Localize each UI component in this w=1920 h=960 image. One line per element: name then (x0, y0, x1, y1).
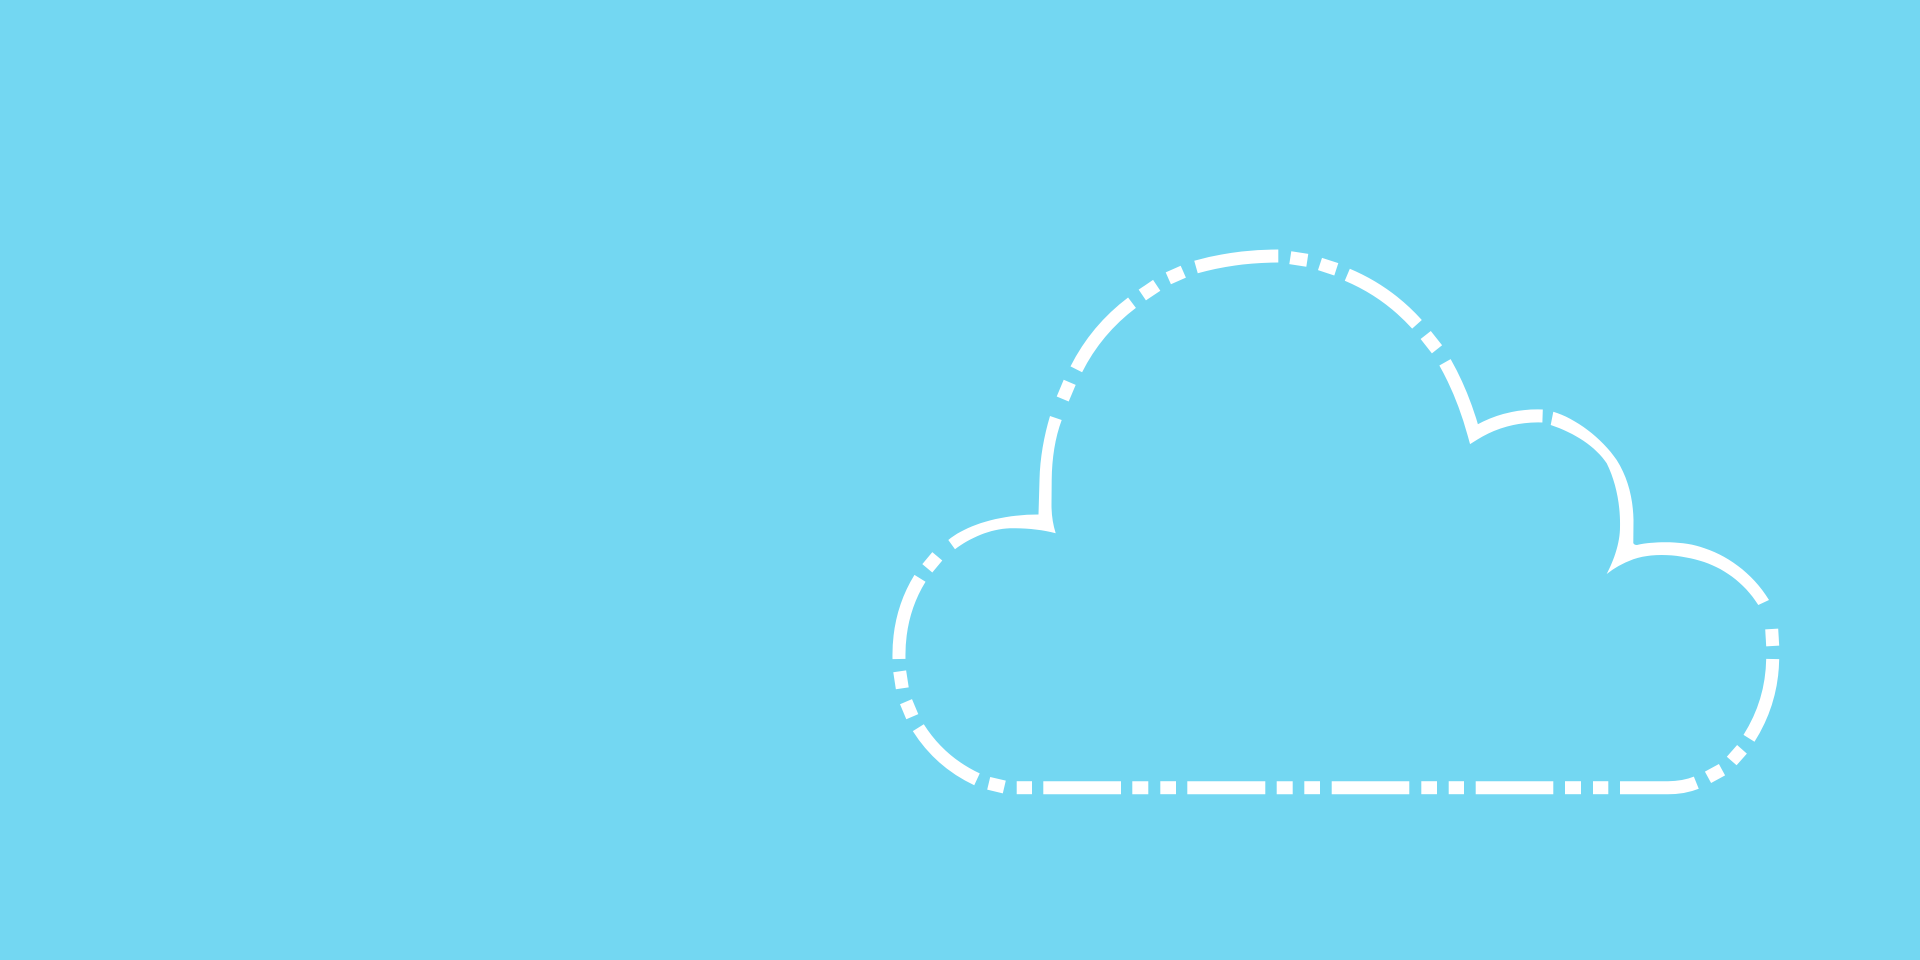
cloud bottom dashes (1017, 781, 1608, 794)
cloud top arc dashes (1063, 256, 1543, 434)
icon: dashed cloud outline (899, 256, 1773, 788)
cloud right cusp (1551, 412, 1769, 605)
cloud right side dashes (1620, 629, 1773, 788)
cloud left cusp (948, 416, 1062, 549)
cloud left side dashes (899, 556, 1004, 787)
